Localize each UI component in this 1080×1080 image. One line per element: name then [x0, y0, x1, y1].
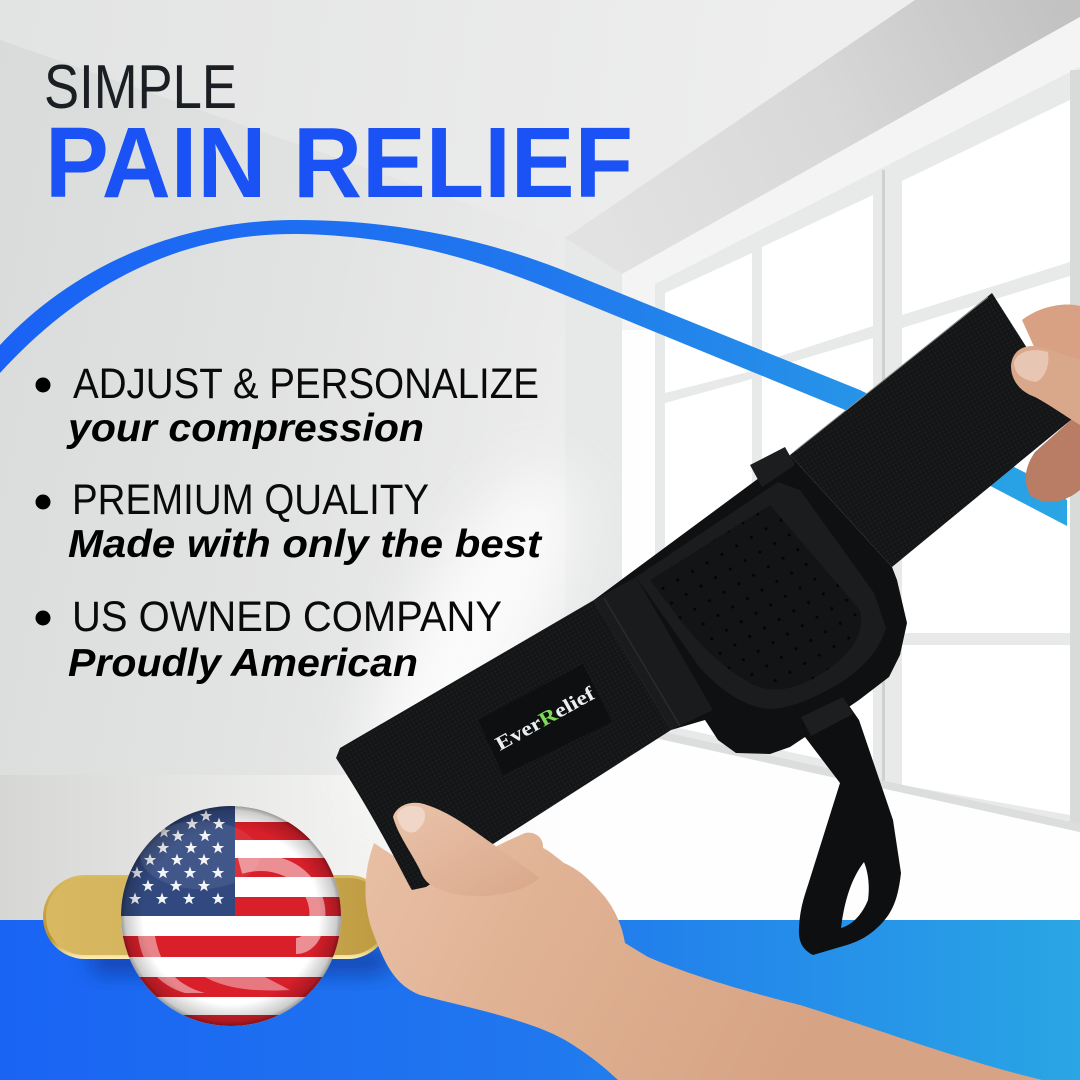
belt backing	[594, 455, 907, 754]
feature: adjust and personalize	[36, 360, 539, 450]
feature: us owned company: Proudly American	[68, 642, 418, 685]
label: everrelief	[478, 664, 612, 775]
feature: adjust and personalize: ADJUST & PERSONALIZE	[73, 360, 539, 408]
stripes	[115, 822, 355, 1027]
right hand fingers behind belt	[1022, 305, 1080, 502]
floor	[0, 775, 1080, 925]
feature: premium quality: Made with only the best	[68, 523, 543, 566]
feature: us owned company	[36, 593, 502, 685]
thumbnail	[1014, 350, 1048, 382]
blue swoosh curve	[0, 220, 1067, 526]
canton	[115, 800, 235, 916]
ceiling	[0, 0, 915, 238]
title line: pain relief: PAIN RELIEF	[45, 107, 633, 219]
loop strap	[799, 697, 901, 955]
label: everrelief: EverRelief	[492, 683, 599, 755]
feature: adjust and personalize: your compression	[66, 407, 424, 450]
elastic section	[594, 577, 713, 730]
product: black hernia belt	[336, 293, 1072, 955]
feature: premium quality: PREMIUM QUALITY	[72, 476, 429, 524]
gloss reflections	[138, 936, 205, 993]
title line: simple: SIMPLE	[44, 53, 237, 122]
pad flap	[636, 482, 886, 709]
window frame	[622, 17, 1080, 775]
feature: us owned company: US OWNED COMPANY	[72, 593, 502, 641]
window panes	[665, 100, 1070, 815]
gold pill badge	[43, 875, 390, 974]
right strap	[790, 293, 1072, 567]
right thumb	[1011, 346, 1080, 425]
left hand palm behind belt	[365, 833, 1042, 1080]
left thumb	[393, 803, 540, 896]
feature list	[36, 360, 543, 685]
feature: premium quality	[36, 476, 543, 566]
title	[44, 53, 633, 219]
icon: american flag sphere	[121, 806, 341, 1026]
left strap	[336, 600, 671, 890]
strap tab	[750, 447, 795, 487]
blue bottom band	[0, 920, 1080, 1080]
thumbnail	[397, 806, 425, 833]
